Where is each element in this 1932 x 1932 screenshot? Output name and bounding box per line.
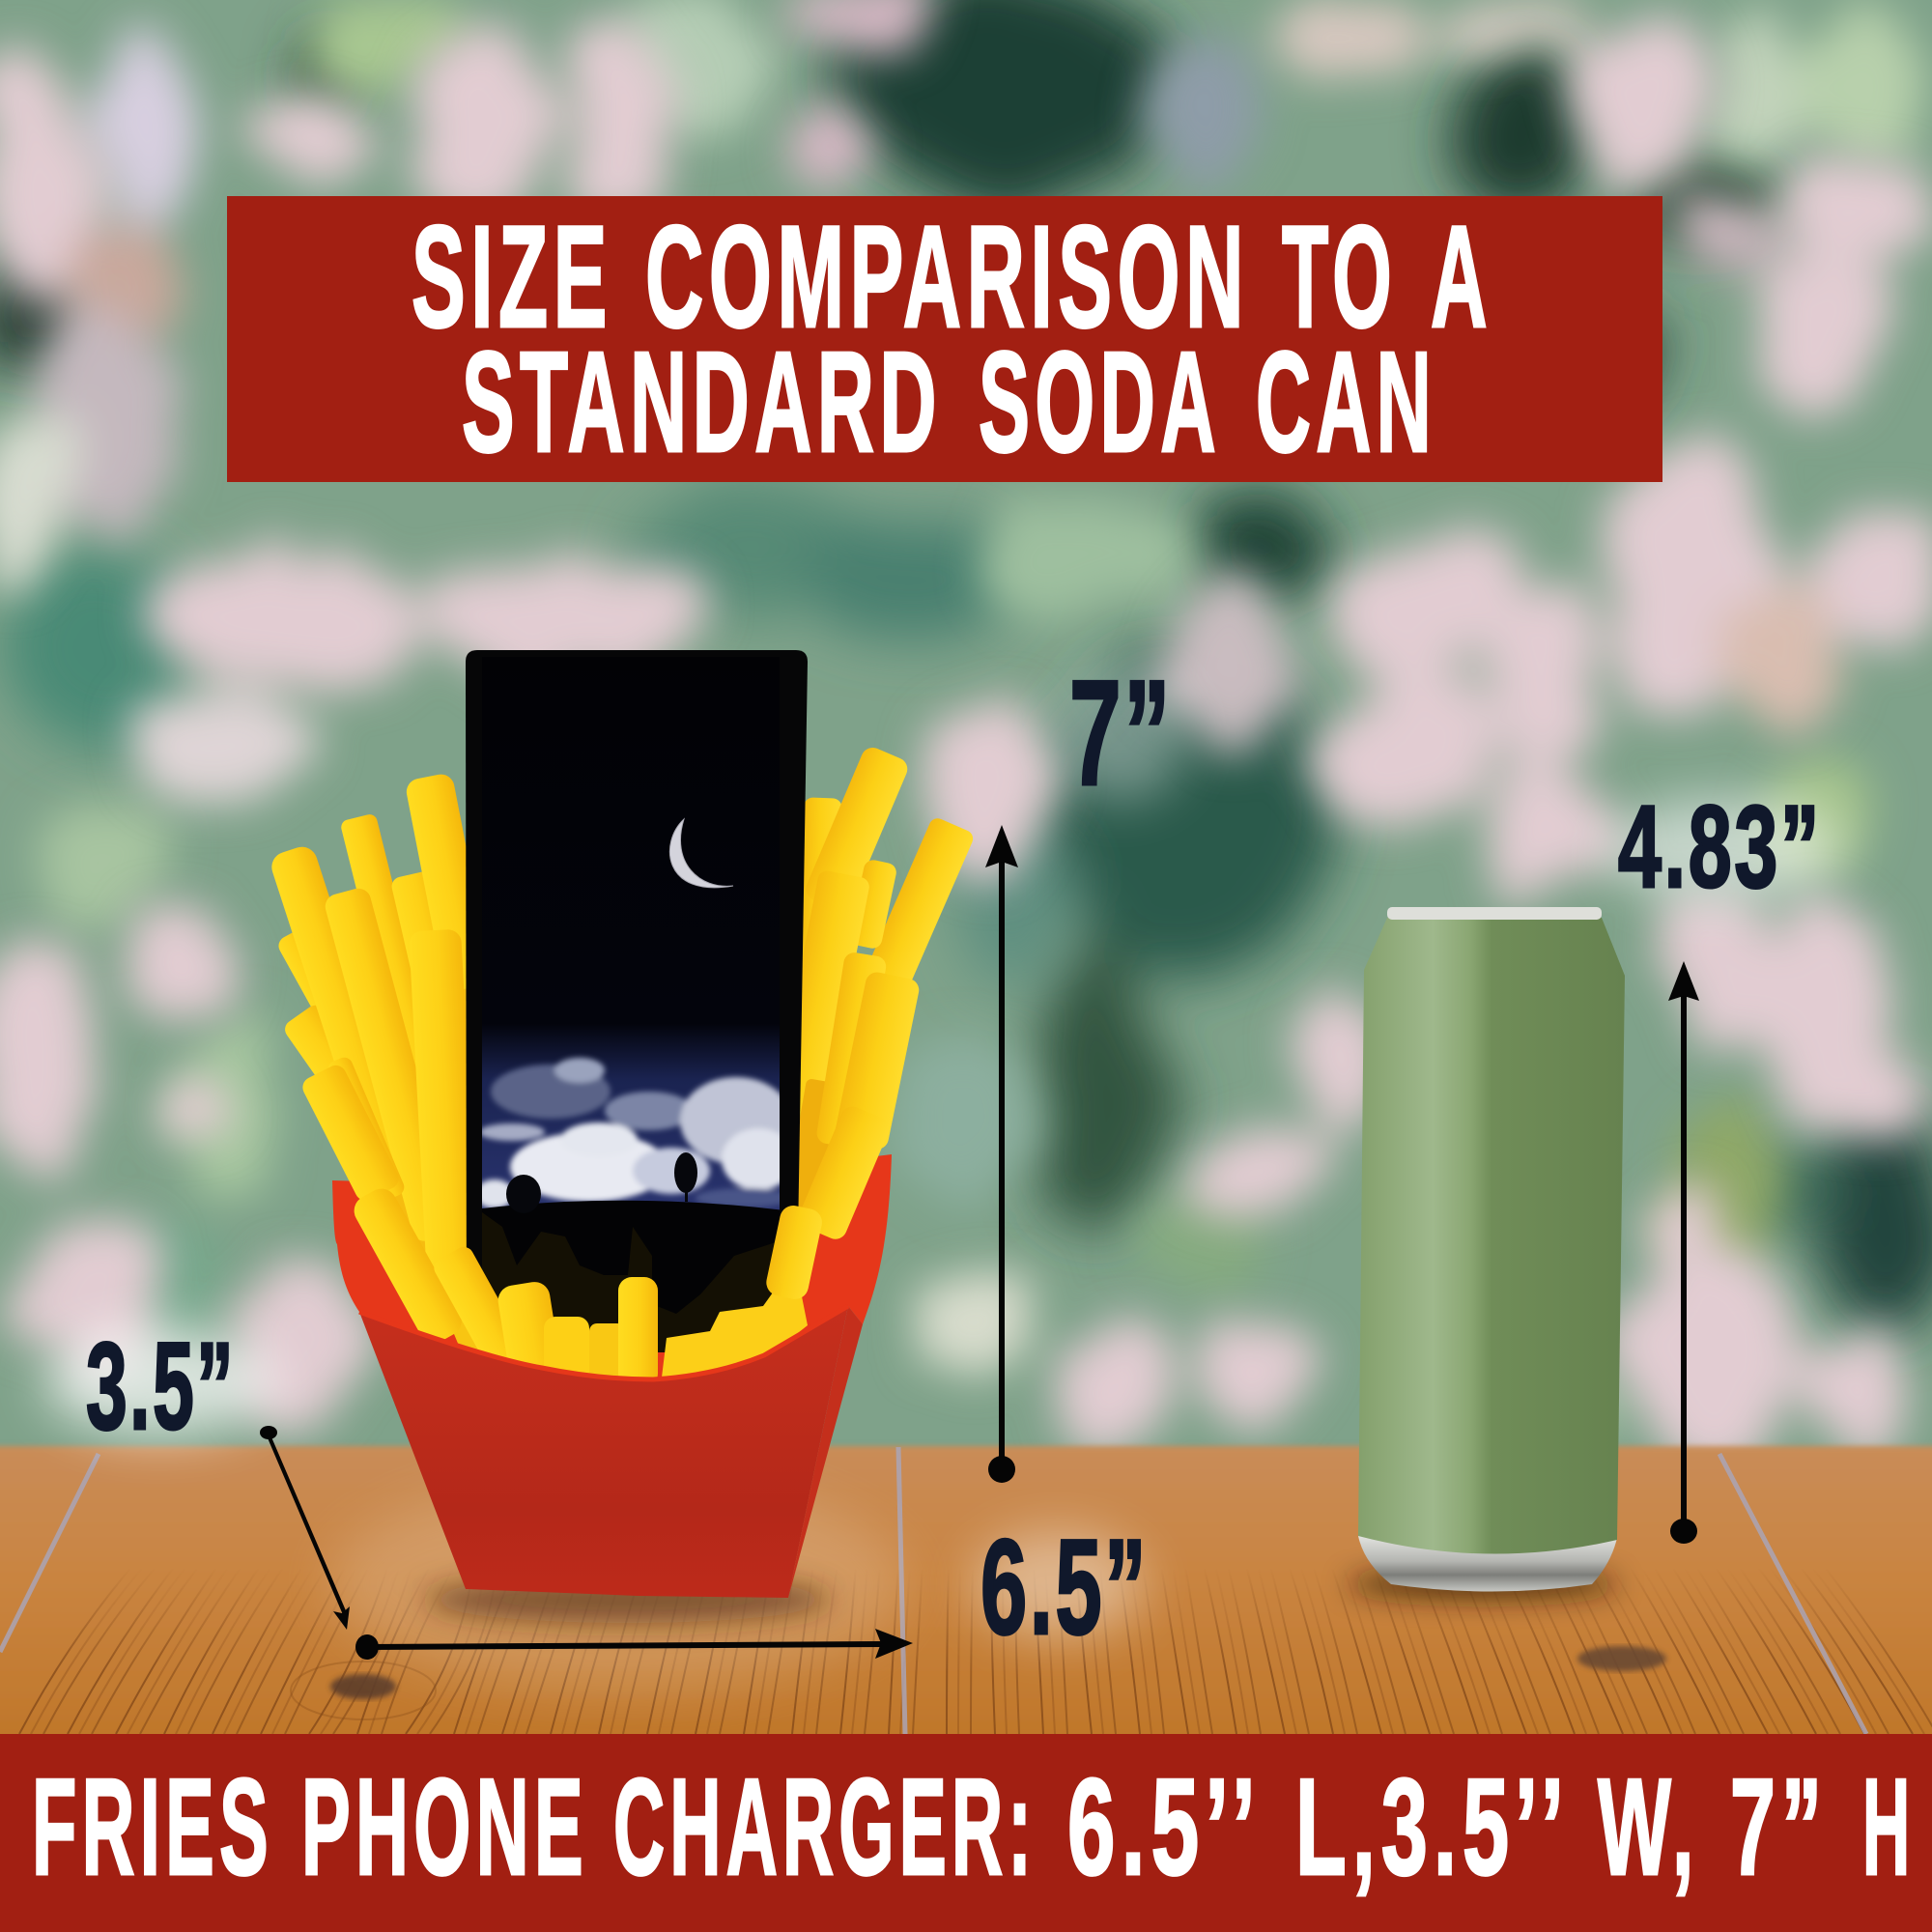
label: 3.5 inches: 3.5”: [86, 1318, 236, 1456]
fry box right side panel: [788, 1306, 863, 1598]
title banner: [227, 195, 1662, 482]
title line 2: SODA: [979, 323, 1221, 482]
left tree: [506, 1175, 541, 1213]
dimensions text: W,: [1598, 1750, 1699, 1904]
label: 7 inches: 7”: [1069, 649, 1173, 816]
label: 6.5 inches: 6.5”: [980, 1511, 1149, 1662]
plank gaps: [0, 1447, 1866, 1734]
blurred foliage background: [0, 0, 1932, 1468]
fry box front: [359, 1306, 848, 1598]
dimensions text: 7”: [1730, 1750, 1828, 1904]
dimensions text: 6.5’’: [1067, 1750, 1262, 1904]
soda can: [1358, 907, 1625, 1592]
wood grain: [18, 1584, 1932, 1734]
title line 1: TO: [1282, 195, 1397, 357]
dimensions text: [32, 1750, 1915, 1904]
title line 1: [412, 195, 1492, 357]
title line 2: STANDARD: [462, 323, 942, 482]
title line 1: SIZE: [412, 195, 612, 357]
label glow patches: [43, 667, 1840, 1637]
title line 2: CAN: [1256, 323, 1436, 482]
front fries: [349, 1103, 893, 1387]
bottom dimensions bar: [0, 1734, 1932, 1932]
arrow: 3.5 inch width: [260, 1426, 350, 1630]
fry box back and interior: [332, 1154, 892, 1391]
fries reflection in screen: [482, 1212, 779, 1352]
label: 4.83 inches: 4.83”: [1618, 781, 1822, 912]
right tree: [674, 1152, 697, 1202]
dark foliage shadows: [0, 0, 1932, 1343]
phone wallpaper: [474, 657, 801, 1352]
arrow: 6.5 inch length: [355, 1629, 913, 1660]
dimensions text: CHARGER:: [613, 1750, 1037, 1904]
moon: [669, 819, 733, 888]
back fries: [268, 744, 976, 1294]
fry box front rim: [359, 1306, 848, 1379]
title line 1: COMPARISON: [645, 195, 1249, 357]
dimensions text: L,3.5’’: [1295, 1750, 1570, 1904]
pink leaves: [0, 0, 1932, 1463]
fries phone charger product: [268, 650, 976, 1598]
knots: [291, 1646, 1666, 1719]
shadows on the table: [425, 1571, 1618, 1623]
phone: [466, 650, 808, 1352]
pale green foliage: [29, 0, 1923, 1449]
hill: [474, 1201, 801, 1352]
wooden table: [0, 1446, 1932, 1746]
title line 1: A: [1431, 195, 1492, 357]
dimensions text: FRIES: [32, 1750, 273, 1904]
arrow: 7 inch height: [985, 825, 1018, 1483]
arrow: 4.83 inch height: [1668, 961, 1699, 1544]
dimensions text: PHONE: [301, 1750, 588, 1904]
